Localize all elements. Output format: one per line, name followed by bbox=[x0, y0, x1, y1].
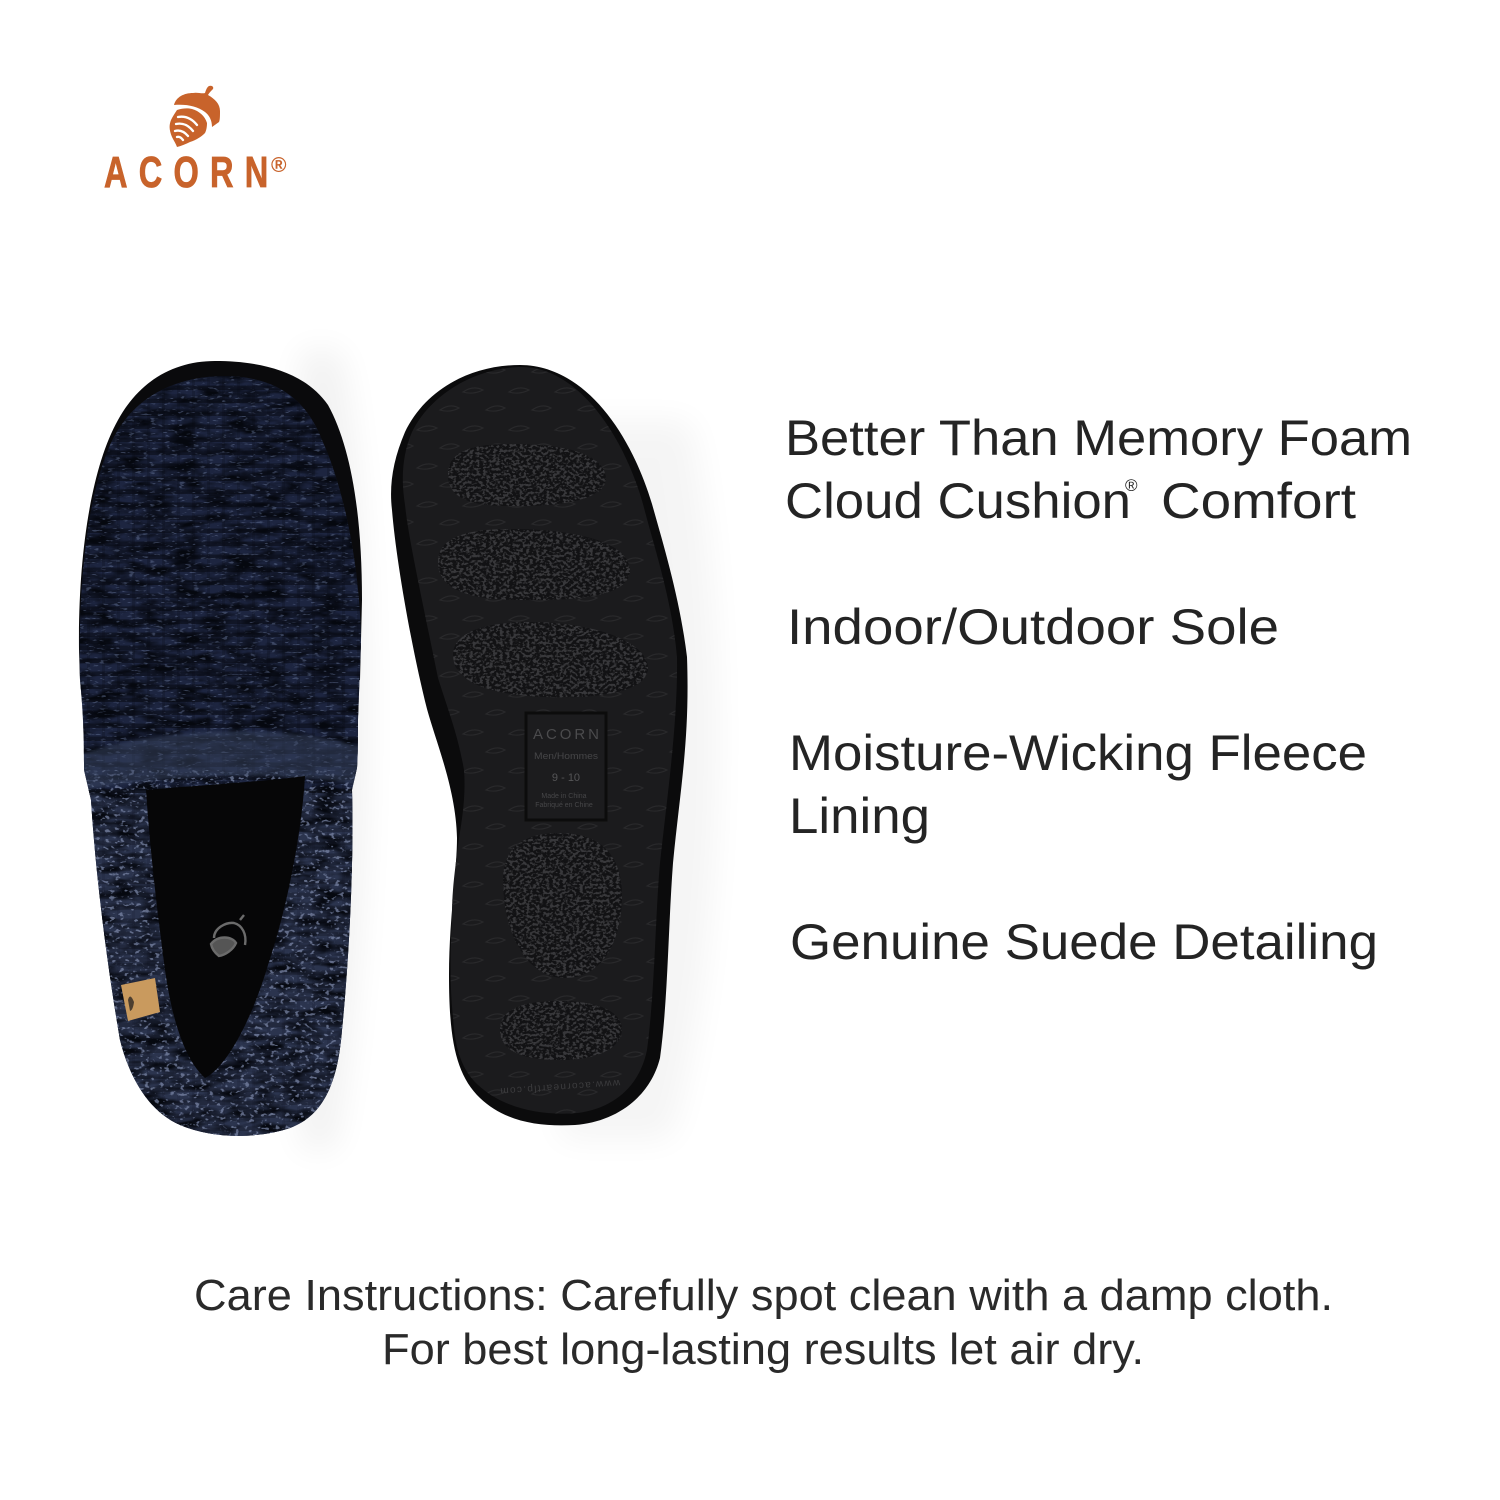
feature: Lining: Lining bbox=[789, 788, 930, 844]
feature: Genuine Suede Detailing: Genuine Suede Detailing bbox=[790, 914, 1378, 970]
size label: 9 - 10 bbox=[552, 772, 580, 784]
collar band bbox=[80, 731, 362, 790]
feature: Indoor/Outdoor Sole: Indoor/Outdoor Sole bbox=[787, 599, 1279, 655]
traction pads bbox=[438, 444, 648, 1060]
feature: Better Than Memory Foam: Better Than Memory Foam bbox=[785, 410, 1412, 466]
insole acorn logo bbox=[211, 915, 245, 956]
size label: ACORN bbox=[533, 726, 599, 743]
feature: Moisture-Wicking Fleece: Moisture-Wicking Fleece bbox=[789, 725, 1367, 781]
care instructions bbox=[194, 1271, 1333, 1374]
care line 1: Care Instructions: Carefully spot clean with a damp cloth. bbox=[194, 1271, 1333, 1320]
navy chenille upper bbox=[70, 365, 370, 1145]
size label bbox=[526, 713, 606, 820]
sole leaf tread bbox=[403, 367, 677, 1114]
feature list bbox=[785, 410, 1412, 970]
soft shadow bbox=[300, 350, 368, 1150]
upside-down web address: www.acorneartlp.com bbox=[500, 1077, 621, 1096]
suede tag bbox=[121, 978, 160, 1021]
black suede outsole edge bbox=[79, 361, 362, 680]
suede outline bbox=[391, 365, 688, 1125]
feature: Cloud Cushion Comfort bbox=[785, 473, 1356, 529]
feature: Cloud Cushion Comfort: Cloud Cushion bbox=[785, 473, 1131, 529]
wordmark: ACORN bbox=[104, 148, 268, 197]
feature: Cloud Cushion Comfort: ® bbox=[1125, 476, 1138, 495]
rubber outsole bbox=[403, 367, 677, 1114]
care line 2: For best long-lasting results let air dry. bbox=[382, 1325, 1144, 1374]
product: slipper top view bbox=[70, 350, 370, 1150]
product: slipper sole bbox=[391, 365, 718, 1140]
soft shadow bbox=[560, 420, 718, 1140]
size label: Men/Hommes bbox=[534, 751, 598, 762]
icon: acorn bbox=[170, 86, 220, 147]
fleece lined opening bbox=[146, 776, 305, 1078]
logo: Acorn bbox=[104, 86, 287, 197]
size label: Made in China bbox=[541, 793, 587, 800]
registered mark: ® bbox=[271, 154, 287, 177]
feature: Cloud Cushion Comfort: Comfort bbox=[1161, 473, 1356, 529]
size label: Fabriqué en Chine bbox=[535, 802, 593, 809]
